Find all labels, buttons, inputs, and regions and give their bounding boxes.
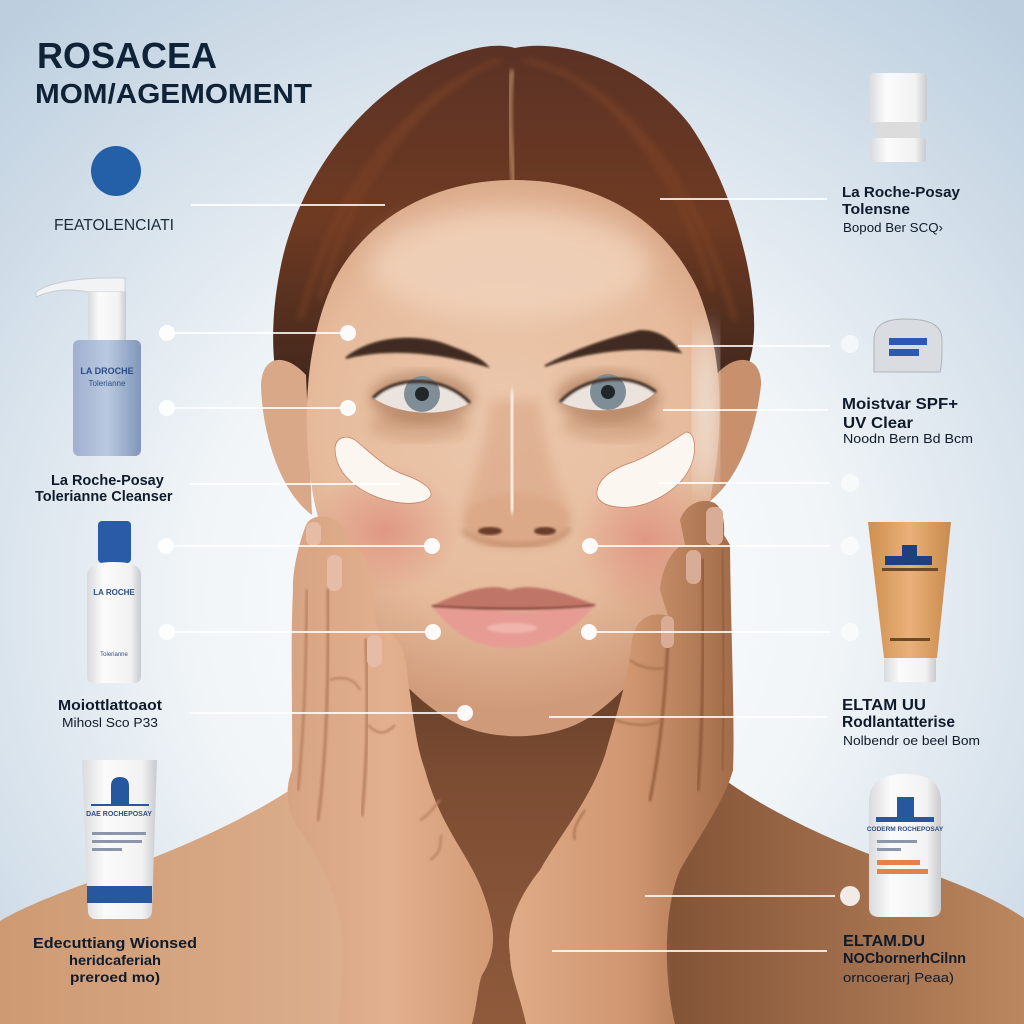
label: educational: heridcaferiah bbox=[69, 952, 161, 968]
hair bbox=[273, 46, 754, 435]
left ear bbox=[261, 360, 312, 515]
label: eltam uu bbox=[842, 697, 980, 748]
label: tolensne: Bopod Ber SCQ› bbox=[843, 221, 943, 235]
label: blue circle: FEATOLENCIATI bbox=[54, 217, 174, 234]
nails left bbox=[306, 522, 382, 667]
product: pump bottle: Tolerianne bbox=[89, 379, 126, 388]
product: white stick: CODERM ROCHEPOSAY bbox=[867, 826, 944, 833]
left eye bbox=[370, 372, 474, 424]
product: white bottle with blue cap bbox=[87, 521, 141, 683]
right ear bbox=[705, 360, 761, 505]
label: cleanser: La Roche-Posay bbox=[51, 473, 164, 489]
label: eltam du: orncoerarj Peaa) bbox=[843, 971, 954, 985]
label: eltam uu: Rodlantatterise bbox=[842, 714, 955, 731]
title: ROSACEA bbox=[37, 35, 217, 76]
right eye bbox=[556, 371, 660, 423]
label: moisturiser: Mihosl Sco P33 bbox=[62, 715, 158, 730]
product: white bottle with blue cap: LA ROCHE bbox=[93, 588, 135, 597]
title bbox=[35, 35, 312, 109]
product: white tube left bbox=[82, 760, 157, 919]
product: white jar top right bbox=[869, 73, 927, 162]
label: educational bbox=[33, 935, 197, 985]
label: moisturiser: Moiottlattoaot bbox=[58, 697, 162, 714]
label: eltam du bbox=[843, 933, 966, 985]
label: educational: preroed mo) bbox=[70, 969, 160, 985]
product: gold tube bbox=[868, 522, 951, 682]
icon: blue circle bbox=[91, 146, 141, 196]
label: eltam du: ELTAM.DU bbox=[843, 933, 925, 950]
face bbox=[307, 180, 720, 736]
under-eye shading bbox=[370, 409, 662, 441]
nose bbox=[462, 395, 571, 548]
label: moistvar: Noodn Bern Bd Bcm bbox=[843, 432, 973, 446]
label: moistvar: UV Clear bbox=[843, 415, 913, 432]
callout lines and dots bbox=[158, 199, 860, 951]
cheek redness left bbox=[310, 465, 460, 595]
forehead highlight bbox=[370, 210, 650, 320]
right eyebrow bbox=[545, 331, 680, 366]
product: white tube left: DAE ROCHEPOSAY bbox=[86, 811, 152, 818]
label: eltam du: NOCbornerhCilnn bbox=[843, 950, 966, 967]
label: educational: Edecuttiang Wionsed bbox=[33, 935, 197, 952]
label: cleanser: Tolerianne Cleanser bbox=[35, 489, 173, 505]
right face glare bbox=[697, 325, 715, 495]
product: pump bottle: LA DROCHE bbox=[80, 366, 134, 376]
label: moistvar: Moistvar SPF+ bbox=[842, 396, 958, 413]
lips bbox=[432, 587, 595, 648]
left hand bbox=[288, 516, 493, 1024]
label: tolensne: Tolensne bbox=[842, 201, 910, 218]
cheek redness right bbox=[575, 465, 715, 615]
left eyebrow bbox=[346, 339, 487, 366]
shoulders and neck bbox=[0, 640, 1024, 1024]
product: white bottle with blue cap: Tolerianne bbox=[100, 652, 129, 658]
nails right bbox=[661, 507, 723, 648]
title: MOM/AGEMOMENT bbox=[35, 78, 312, 109]
product: clear compact bbox=[874, 319, 942, 372]
product: pump bottle bbox=[36, 278, 141, 456]
product: white stick bbox=[867, 774, 944, 917]
cream right cheek bbox=[597, 432, 695, 507]
label: tolensne: La Roche-Posay bbox=[842, 184, 961, 201]
right hand bbox=[509, 501, 734, 1024]
label: moistvar bbox=[842, 396, 973, 446]
label: eltam uu: ELTAM UU bbox=[842, 697, 926, 714]
label: tolensne bbox=[842, 184, 961, 235]
cream left cheek bbox=[335, 437, 431, 503]
label: moisturiser bbox=[58, 697, 162, 730]
label: eltam uu: Nolbendr oe beel Bom bbox=[843, 733, 980, 748]
